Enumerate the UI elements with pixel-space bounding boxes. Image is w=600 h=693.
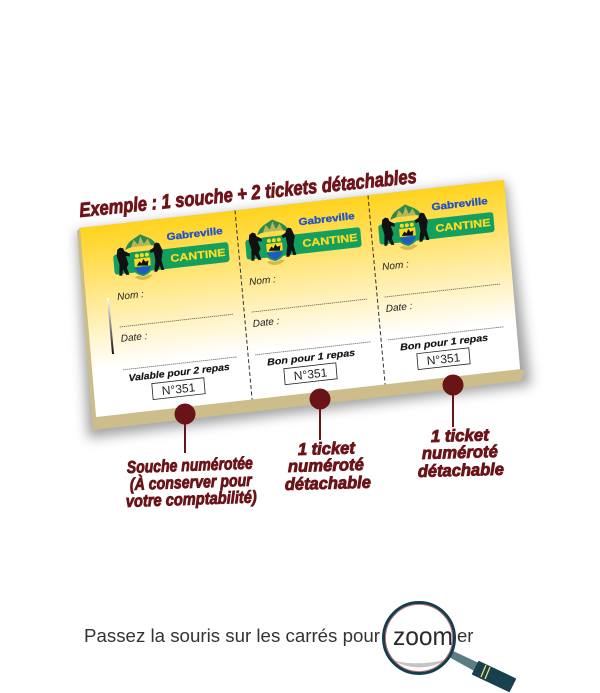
field: nom: Nom :: [382, 259, 410, 273]
stub number box: N°351: [161, 380, 196, 398]
ticket 2: [244, 210, 373, 388]
instruction text: Passez la souris sur les carrés pour: [84, 625, 380, 646]
callout text: stub: (À conserver pour: [129, 471, 253, 494]
zoomed word: zoom: [393, 621, 453, 651]
stub: souche: [112, 224, 241, 403]
title: Exemple : 1 souche + 2 tickets détachables: [78, 166, 418, 222]
logo: ticket 3: CANTINE: [435, 217, 491, 235]
ticket sheet: [80, 180, 520, 417]
beige stub edge of ticket book: [77, 180, 526, 430]
instruction text end: er: [457, 625, 473, 646]
ticket 2 number box: N°351: [293, 365, 328, 383]
perforation line 1: [235, 210, 252, 400]
callout text: ticket 3: 1 ticket: [431, 425, 490, 446]
callout text: ticket 3: détachable: [418, 460, 504, 481]
stub number box: [152, 378, 205, 400]
logo: ticket 3: Gabreville: [431, 196, 489, 213]
callout marker: stub: [174, 404, 196, 453]
logo: ticket 2: CANTINE: [302, 232, 358, 250]
logo: stub: CANTINE: [170, 247, 226, 265]
ticket 3 number box: [417, 348, 470, 370]
logo: ticket 3: [377, 195, 495, 253]
ticket 3 value text: Bon pour 1 repas: [400, 333, 489, 353]
callout marker: ticket 3: [442, 374, 464, 427]
callout text: stub: Souche numérotée: [126, 454, 253, 477]
stub value text: Valable pour 2 repas: [128, 362, 231, 384]
logo: ticket 2: Gabreville: [298, 211, 356, 228]
callout text: ticket 2: [285, 438, 371, 494]
callout text: stub: votre comptabilité): [125, 487, 257, 511]
ticket 3: [377, 194, 506, 373]
logo: stub: Gabreville: [166, 226, 224, 243]
callout text: ticket 3: [418, 425, 504, 481]
callout text: ticket 2: 1 ticket: [298, 438, 356, 459]
callout text: ticket 3: numéroté: [422, 442, 498, 463]
icon: magnifying glass: [384, 602, 515, 691]
perforation line 2: [368, 195, 385, 385]
field: nom: Nom :: [249, 274, 277, 288]
callout text: stub: [125, 454, 257, 511]
field: date: Date :: [252, 316, 280, 330]
logo: stub: [112, 224, 230, 283]
dark sliver mark on stub: [107, 298, 114, 354]
callout marker: ticket 2: [310, 388, 330, 440]
logo: ticket 2: [244, 210, 362, 268]
ticket 2 value text: Bon pour 1 repas: [267, 348, 356, 369]
field: date: Date :: [120, 331, 148, 345]
field: date: Date :: [385, 301, 413, 315]
ticket 3 number box: N°351: [426, 350, 461, 368]
ticket 2 number box: [284, 363, 337, 385]
callout text: ticket 2: numéroté: [288, 455, 364, 476]
callout text: ticket 2: détachable: [285, 473, 371, 494]
card drop shadow: [77, 182, 531, 438]
field: nom: Nom :: [117, 289, 145, 303]
